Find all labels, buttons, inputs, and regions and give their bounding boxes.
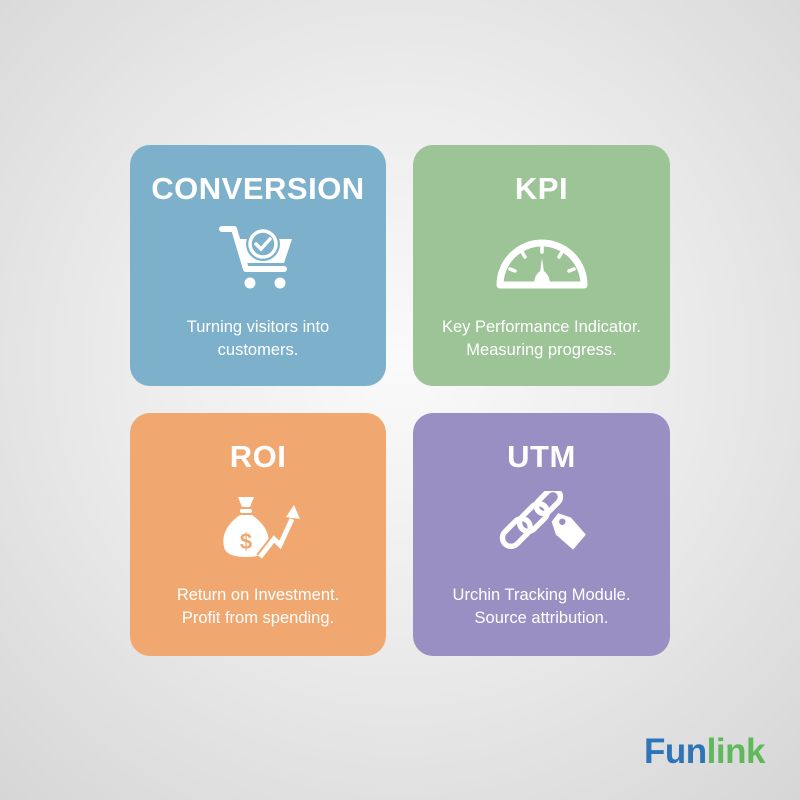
panel: utm (413, 413, 670, 656)
heading: roi: ROI (230, 439, 286, 474)
text: conversion description (187, 318, 329, 359)
icon: gauge (496, 240, 588, 288)
text: kpi description (442, 318, 641, 359)
panel: roi (130, 413, 386, 656)
logo: funlink: Funlink (644, 732, 765, 771)
text: kpi description: Key Performance Indicator. (442, 318, 641, 336)
text: roi description (177, 586, 339, 627)
icon: money bag with arrow (223, 497, 300, 558)
icon: chain link with tag (500, 491, 586, 550)
panel: conversion (130, 145, 386, 386)
text: conversion description: customers. (218, 341, 298, 359)
heading: utm: UTM (507, 439, 576, 474)
panel: kpi (413, 145, 670, 386)
icon: shopping cart with check (219, 226, 292, 288)
icon: money bag with arrow: $ (240, 529, 252, 554)
heading: conversion: CONVERSION (151, 171, 365, 206)
text: utm description: Source attribution. (475, 609, 608, 627)
text: roi description: Profit from spending. (182, 609, 334, 627)
text: utm description (453, 586, 630, 627)
text: roi description: Return on Investment. (177, 586, 339, 604)
heading: kpi: KPI (515, 171, 568, 206)
text: kpi description: Measuring progress. (466, 341, 617, 359)
text: utm description: Urchin Tracking Module. (453, 586, 630, 604)
text: conversion description: Turning visitors into (187, 318, 329, 336)
